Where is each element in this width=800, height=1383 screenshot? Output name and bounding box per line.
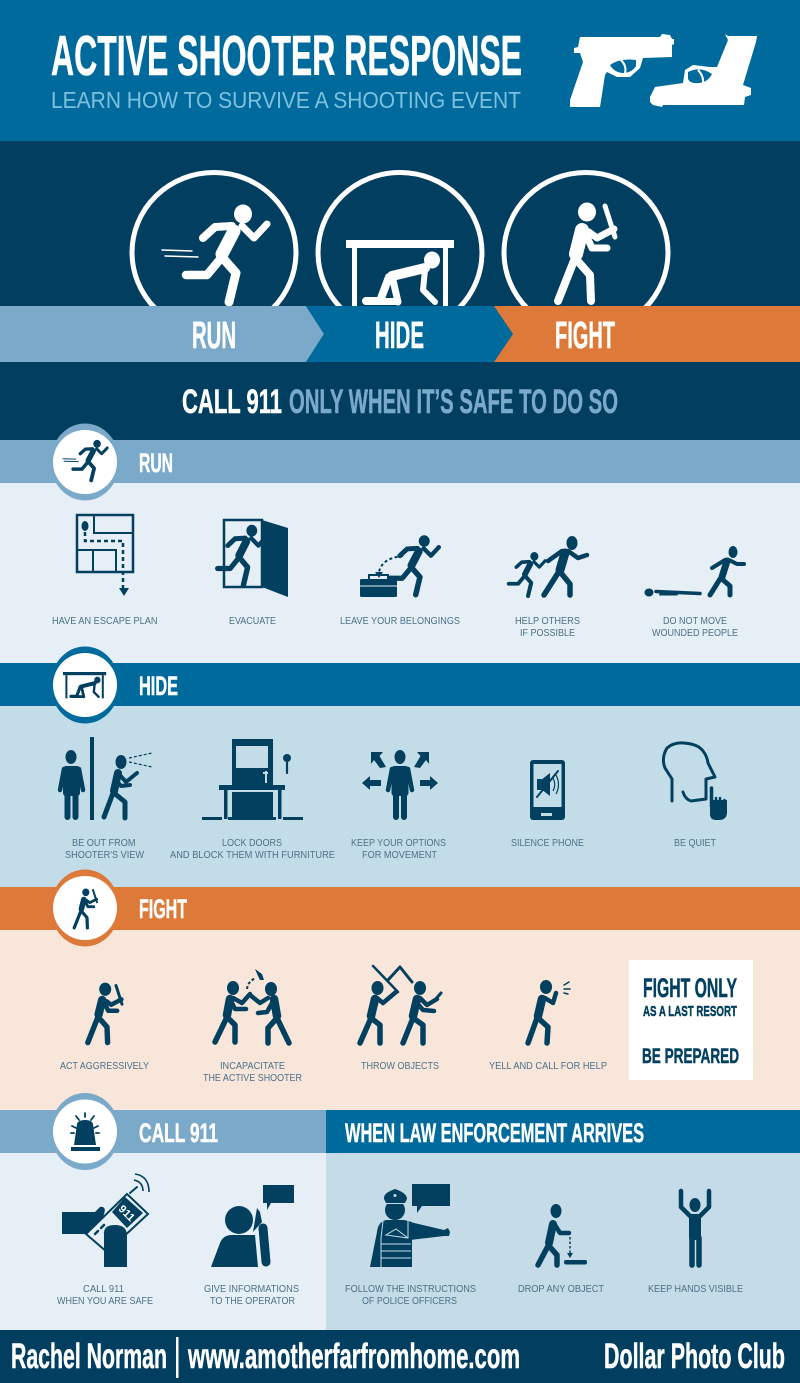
label: keep your options: FOR MOVEMENT — [362, 850, 437, 861]
icon: act aggressively — [88, 983, 122, 1043]
subtitle: LEARN HOW TO SURVIVE A SHOOTING EVENT — [51, 87, 521, 113]
icon: hide circle — [318, 172, 482, 332]
icon: police officer — [370, 1184, 450, 1267]
label: lock doors: AND BLOCK THEM WITH FURNITURE — [170, 850, 335, 861]
heading: call 911: CALL 911 — [139, 1118, 218, 1148]
icon: hands visible — [681, 1191, 709, 1265]
icon: help others — [509, 536, 587, 596]
icon: be quiet head — [663, 743, 727, 820]
label: incapacitate the active shooter: THE ACTIVE SHOOTER — [203, 1073, 302, 1084]
label: be out from shooter's view — [65, 838, 145, 861]
icon: locked door with furniture — [202, 739, 303, 820]
arrow band: hide: HIDE — [375, 315, 424, 357]
callout: fight only as a last resort — [629, 960, 753, 1080]
label: have an escape plan: HAVE AN ESCAPE PLAN — [52, 616, 158, 627]
label: do not move wounded people — [652, 616, 738, 639]
label: silence phone: SILENCE PHONE — [511, 838, 584, 849]
label: follow the instructions: OF POLICE OFFICERS — [362, 1296, 457, 1307]
label: be out from shooter's view: SHOOTER'S VIEW — [65, 850, 145, 861]
heading: run: RUN — [139, 448, 173, 478]
icon: hand dialing 911: 911 — [116, 1203, 137, 1224]
callout: fight only as a last resort: AS A LAST RESORT — [643, 1003, 737, 1020]
label: help others: HELP OTHERS — [515, 616, 580, 627]
icon: run circle — [132, 172, 296, 332]
label: yell and call for help: YELL AND CALL FOR HELP — [489, 1061, 607, 1072]
icon: incapacitate — [215, 969, 289, 1043]
icon: two pistols — [570, 34, 757, 107]
label: do not move wounded people: WOUNDED PEOPLE — [652, 628, 738, 639]
label: leave your belongings: LEAVE YOUR BELONGINGS — [340, 616, 460, 627]
icon: throw objects — [360, 966, 441, 1043]
icon: silenced phone — [530, 760, 565, 820]
label: incapacitate the active shooter — [203, 1061, 302, 1084]
callout: fight only as a last resort: FIGHT ONLY — [643, 973, 737, 1003]
icon: fight badge — [50, 870, 120, 946]
label: evacuate: EVACUATE — [229, 616, 276, 627]
icon: yell — [528, 980, 570, 1043]
callout: fight only as a last resort: BE PREPARED — [642, 1045, 739, 1068]
panel: header — [0, 0, 800, 141]
icon: fight circle — [504, 172, 668, 332]
icon: wounded person — [644, 546, 744, 596]
label: be quiet: BE QUIET — [674, 838, 716, 849]
panel: fight section — [0, 870, 800, 1110]
label: follow the instructions — [345, 1284, 476, 1307]
label: lock doors: LOCK DOORS — [222, 838, 282, 849]
label: follow the instructions: FOLLOW THE INSTRUCTIONS — [345, 1284, 476, 1295]
icon: escape plan — [77, 515, 133, 596]
panel: hide section — [0, 646, 800, 887]
label: give informations — [204, 1284, 299, 1307]
icon: out of shooter's view — [60, 737, 152, 820]
arrow band: fight — [494, 306, 800, 362]
callout: call 911: CALL 911 — [182, 383, 282, 421]
footer: Rachel Norman — [11, 1337, 167, 1376]
label: keep your options — [351, 838, 446, 861]
label: help others — [515, 616, 580, 639]
label: keep hands visible: KEEP HANDS VISIBLE — [648, 1284, 743, 1295]
label: incapacitate the active shooter: INCAPACITATE — [220, 1061, 285, 1072]
label: throw objects: THROW OBJECTS — [361, 1061, 439, 1072]
icon: options for movement — [362, 750, 438, 817]
label: be out from shooter's view: BE OUT FROM — [72, 838, 136, 849]
icon: run badge — [50, 424, 120, 500]
arrow band: run — [0, 306, 324, 362]
label: call 911 when safe: CALL 911 — [83, 1284, 124, 1295]
panel: call 911 section — [0, 1093, 800, 1330]
panel: run section — [0, 424, 800, 663]
label: call 911 when safe: WHEN YOU ARE SAFE — [57, 1296, 153, 1307]
label: do not move wounded people: DO NOT MOVE — [663, 616, 727, 627]
label: help others: IF POSSIBLE — [520, 628, 575, 639]
arrow band: run: RUN — [192, 315, 236, 357]
icon: hide badge — [50, 646, 120, 724]
arrow band: fight: FIGHT — [555, 315, 615, 357]
label: give informations: TO THE OPERATOR — [210, 1296, 295, 1307]
subpanel: when law enforcement arrives — [326, 1110, 800, 1330]
icon: evacuate door — [218, 520, 288, 597]
label: act aggressively: ACT AGGRESSIVELY — [60, 1061, 149, 1072]
icon: siren badge — [50, 1093, 120, 1170]
footer: www.amotherfarfromhome.com — [187, 1337, 520, 1376]
heading: fight: FIGHT — [139, 894, 187, 924]
footer — [0, 1330, 800, 1383]
icon: drop object — [538, 1204, 587, 1265]
label: lock doors — [170, 838, 335, 861]
heading: hide: HIDE — [139, 671, 178, 701]
arrow band: hide — [306, 306, 513, 362]
label: drop any object: DROP ANY OBJECT — [518, 1284, 604, 1295]
icon: give information — [211, 1185, 294, 1267]
callout: call 911 — [182, 383, 618, 421]
label: keep your options: KEEP YOUR OPTIONS — [351, 838, 446, 849]
panel: run hide fight overview — [0, 141, 800, 440]
icon: leave belongings — [360, 535, 439, 597]
label: call 911 when safe — [57, 1284, 153, 1307]
label: give informations: GIVE INFORMATIONS — [204, 1284, 299, 1295]
icon: hand dialing 911 — [62, 1174, 149, 1267]
